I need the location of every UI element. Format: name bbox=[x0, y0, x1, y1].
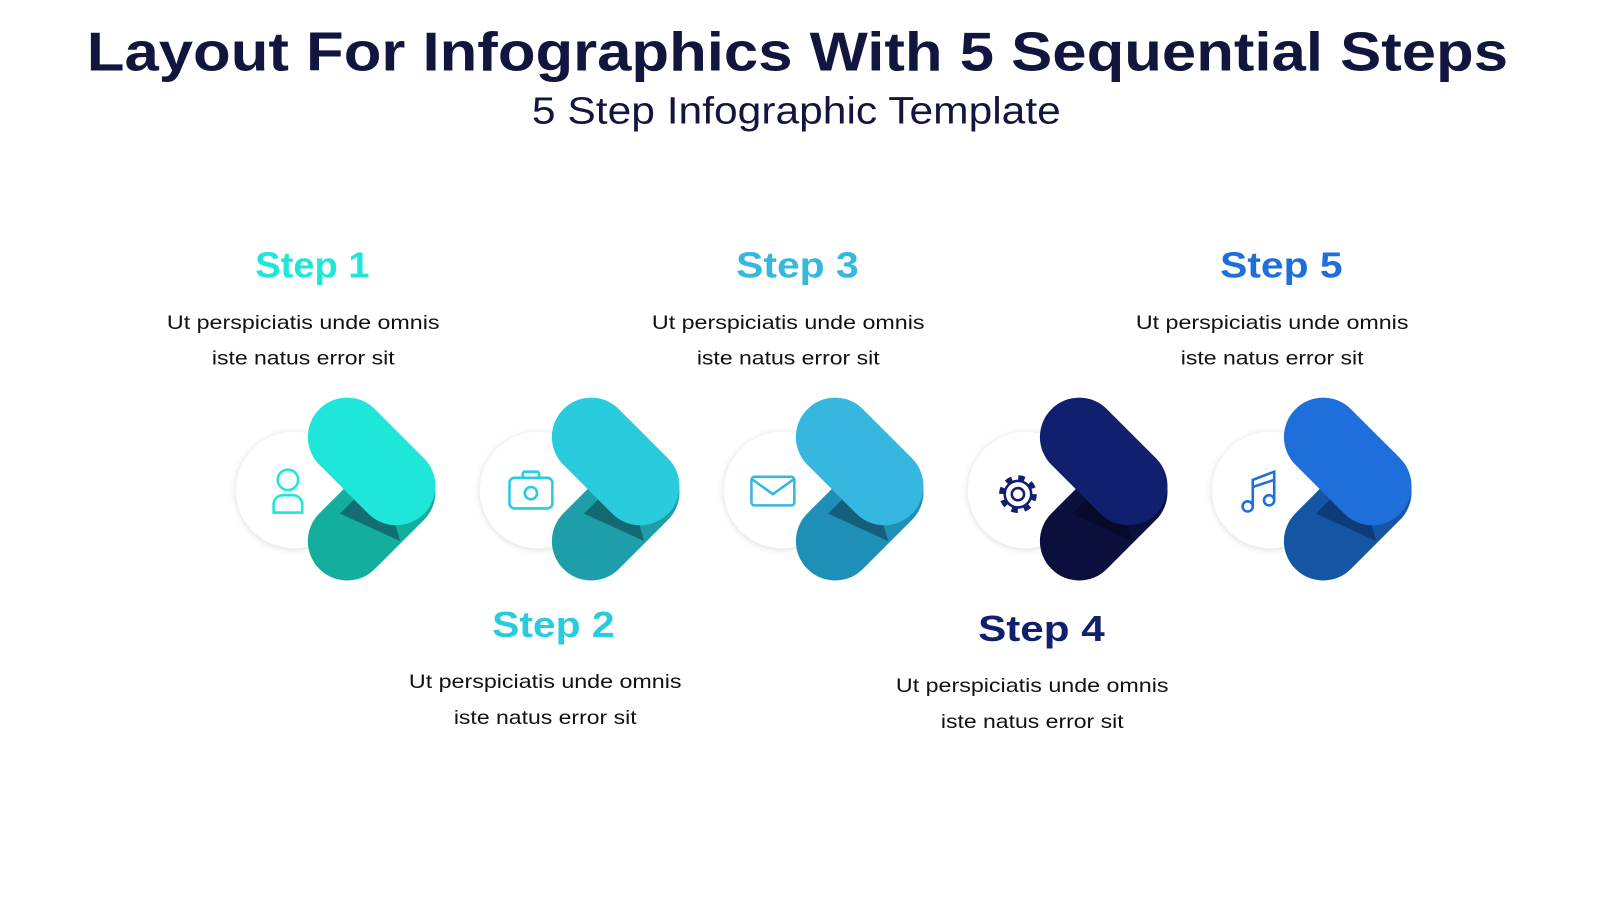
step 5 bbox=[1212, 432, 1376, 548]
text: step 5 bbox=[1136, 246, 1408, 369]
text: step 3 bbox=[652, 246, 925, 369]
text: step 5: Ut perspiciatis unde omnis bbox=[1136, 312, 1408, 334]
subtitle: 5 Step Infographic Template bbox=[532, 91, 1061, 133]
text: step 4: iste natus error sit bbox=[941, 711, 1124, 733]
icon: music bbox=[1243, 472, 1274, 512]
text: step 3: Step 3 bbox=[736, 246, 859, 286]
step 1 bbox=[236, 432, 400, 548]
text: step 4 bbox=[896, 609, 1169, 733]
text: step 2: Ut perspiciatis unde omnis bbox=[409, 671, 682, 693]
icon: gear bbox=[1002, 478, 1034, 510]
text: step 2: iste natus error sit bbox=[454, 707, 637, 729]
text: step 4: Step 4 bbox=[978, 609, 1105, 649]
step 4 bbox=[968, 432, 1132, 548]
text: step 1: Step 1 bbox=[255, 246, 370, 286]
step 3 bbox=[724, 432, 888, 548]
text: step 4: Ut perspiciatis unde omnis bbox=[896, 675, 1169, 697]
text: step 1: iste natus error sit bbox=[212, 347, 395, 369]
text: step 5: iste natus error sit bbox=[1181, 347, 1364, 369]
text: step 2 bbox=[409, 605, 682, 729]
text: step 3: Ut perspiciatis unde omnis bbox=[652, 312, 925, 334]
text: step 2: Step 2 bbox=[492, 605, 615, 645]
text: step 1 bbox=[167, 246, 440, 369]
icon: camera bbox=[509, 472, 552, 508]
text: step 5: Step 5 bbox=[1220, 246, 1343, 286]
text: step 3: iste natus error sit bbox=[697, 347, 880, 369]
title: Layout For Infographics With 5 Sequential Steps bbox=[87, 20, 1508, 82]
icon: person bbox=[274, 470, 302, 513]
step 2 bbox=[480, 432, 644, 548]
icon: mail bbox=[751, 477, 794, 505]
text: step 1: Ut perspiciatis unde omnis bbox=[167, 312, 440, 334]
